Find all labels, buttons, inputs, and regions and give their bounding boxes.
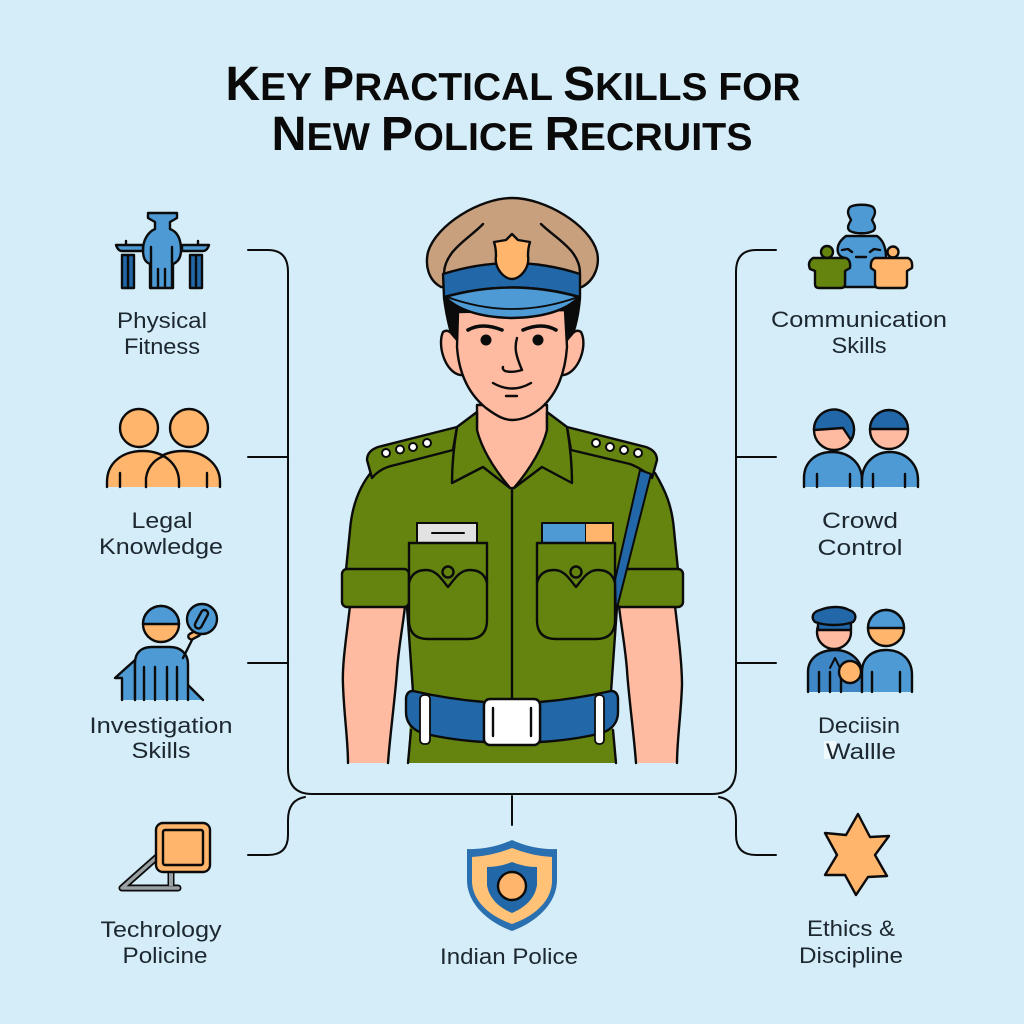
central police officer figure xyxy=(342,198,683,763)
icon: star xyxy=(825,814,889,895)
belt xyxy=(406,691,618,745)
label: Policine xyxy=(122,943,208,968)
connector lines xyxy=(248,250,776,855)
pockets xyxy=(409,543,615,639)
pocket cards xyxy=(417,523,613,544)
label: Deciisin xyxy=(818,713,900,738)
label: Physical xyxy=(117,308,207,333)
skill: physical fitness xyxy=(116,213,209,359)
skill: communication skills xyxy=(771,205,947,358)
shoulder boards xyxy=(367,427,657,478)
label: Discipline xyxy=(799,943,903,968)
label: Indian Police xyxy=(440,944,578,969)
title: NEW POLICE RECRUITS xyxy=(272,108,753,161)
neck xyxy=(477,405,547,490)
title xyxy=(226,58,800,161)
icon: weightlifter xyxy=(116,213,209,288)
icon: monitor on stand xyxy=(122,823,210,888)
icon: speaker with two listeners xyxy=(809,205,912,288)
label: Legal xyxy=(132,508,192,533)
label: Wallle xyxy=(826,739,896,764)
head xyxy=(441,298,583,420)
skill: decision making xyxy=(808,607,912,764)
skill: crowd control xyxy=(804,409,918,560)
skill: technology policing xyxy=(100,823,222,968)
label: Fitness xyxy=(124,334,200,359)
label: Skills xyxy=(832,333,886,358)
label: Techrology xyxy=(100,917,222,942)
police cap xyxy=(427,198,598,318)
label smudge xyxy=(824,741,836,759)
icon: two people xyxy=(107,409,220,487)
shoulder strap xyxy=(615,470,651,612)
shirt xyxy=(342,445,683,763)
label: Crowd xyxy=(822,508,898,533)
label: Skills xyxy=(132,738,190,763)
label: Control xyxy=(818,535,902,560)
title: KEY PRACTICAL SKILLS FOR xyxy=(226,58,800,111)
label: Knowledge xyxy=(99,534,223,559)
skill: legal knowledge xyxy=(99,409,223,559)
icon: two officers xyxy=(804,409,918,487)
label: Investigation xyxy=(90,713,232,738)
icon: officer and colleague xyxy=(808,607,912,692)
skill: ethics and discipline xyxy=(799,814,903,968)
icon: shield xyxy=(467,840,557,931)
collar xyxy=(452,412,572,488)
emblem: indian police xyxy=(440,840,578,969)
arms xyxy=(343,606,682,763)
label: Ethics & xyxy=(807,916,895,941)
icon: investigator with magnifier xyxy=(115,604,217,700)
skill: investigation skills xyxy=(90,604,232,763)
label: Communication xyxy=(771,307,947,332)
